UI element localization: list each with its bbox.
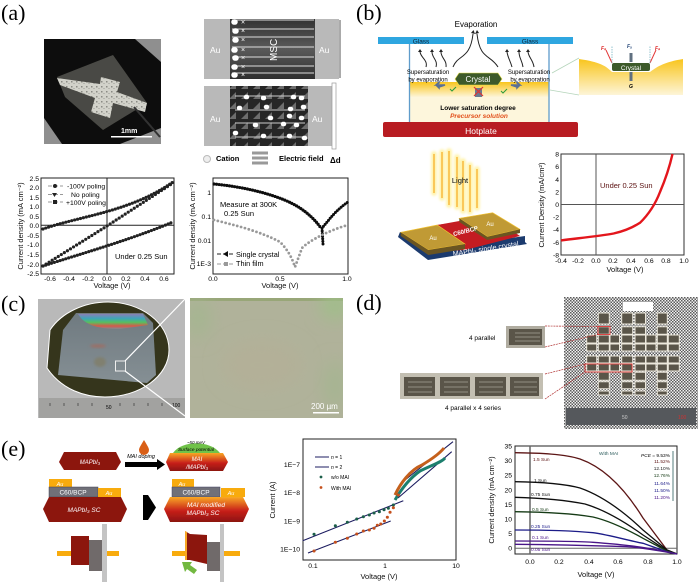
chart: J-V under poling: 0.6: [159, 276, 169, 283]
panel: b: [356, 0, 689, 274]
heading: c: (c): [1, 291, 25, 316]
chart: log J-V single crystal vs thin film: 0.0: [208, 276, 218, 283]
chart: J-V at varying sun intensity: 1.0: [672, 559, 682, 566]
diagram: MAI doping: /MAPbI₃: [185, 465, 209, 471]
chart: I-V log-log: n = 1: [331, 455, 342, 461]
icon: light rays: Light: [452, 176, 469, 185]
device: MAPbI3 single crystal cell: Au: [486, 222, 494, 228]
chart: J-V under poling: 0.0: [102, 276, 112, 283]
schematic: MSC ion migration: ×: [241, 20, 245, 26]
chart: log J-V single crystal vs thin film: Voltage (V): [261, 281, 299, 290]
chart: J-V under 0.25 sun: -6: [553, 240, 559, 247]
chart: J-V under 0.25 sun: Under 0.25 Sun: [600, 181, 653, 190]
chart: J-V under 0.25 sun: 0.8: [661, 258, 671, 265]
chart: I-V log-log: With MAI: [331, 486, 351, 492]
chart: J-V under 0.25 sun: -0.4: [555, 258, 567, 265]
chart: J-V under 0.25 sun: -4: [553, 227, 559, 234]
chart: J-V at varying sun intensity: 25: [504, 473, 512, 480]
device: MAPbI3 single crystal cell: Au: [429, 236, 437, 242]
chart: J-V under poling: 0.4: [140, 276, 150, 283]
panel: e: [1, 436, 682, 582]
chart: I-V log-log: 1: [383, 563, 387, 570]
chart: J-V under poling: 1.0: [30, 204, 39, 211]
chart: J-V at varying sun intensity: 12.10%: [654, 466, 671, 472]
schematic: MSC ion migration: ×: [241, 72, 245, 79]
diagram: evaporation crystallization: Supersaturation: [407, 70, 449, 76]
chart: J-V at varying sun intensity: 5: [508, 531, 512, 538]
chart: J-V under 0.25 sun: 0.0: [591, 258, 601, 265]
icon: green arrow: [182, 562, 197, 574]
chart: J-V at varying sun intensity: PCE = 9.53%: [641, 453, 671, 459]
chart: log J-V single crystal vs thin film: 1.0: [342, 276, 352, 283]
diagram: MAI doping: [59, 440, 228, 471]
diagram: evaporation crystallization: Glass: [413, 38, 430, 46]
diagram: evaporation crystallization: Crystal: [466, 75, 491, 84]
schematic: MSC ion migration: ×: [241, 64, 245, 71]
diagram: device after: Au: [178, 482, 185, 488]
diagram: evaporation crystallization: by evaporation: [510, 78, 550, 84]
photo: wafer: [38, 299, 185, 418]
chart: J-V at varying sun intensity: 0.5 Sun: [532, 507, 549, 513]
photo: micrograph: [190, 298, 343, 418]
diagram: device before: Au: [105, 491, 112, 497]
chart: I-V log-log: 1E−7: [284, 462, 300, 469]
chart: J-V under poling: 2.0: [30, 185, 39, 192]
scale bar label: 200 µm: [311, 402, 338, 411]
photo: wafer: 50: [106, 405, 112, 411]
chart: J-V under 0.25 sun: 1.0: [679, 258, 689, 265]
legend: cation and electric field: Cation: [216, 154, 240, 163]
photo: module array on grid: 50: [622, 415, 628, 421]
diagram: device after: Au: [227, 491, 234, 497]
diagram: evaporation crystallization: Precursor solution: [450, 113, 508, 120]
chart: J-V under poling: -2.5: [27, 271, 39, 278]
inset: crystal force balance: Fₛ: [655, 46, 661, 52]
chart: J-V at varying sun intensity: Current density (mA cm⁻²): [487, 456, 496, 544]
schematic: MSC ion migration: Au: [210, 45, 221, 55]
chart: J-V under poling: -1.0: [27, 242, 39, 249]
chart: J-V at varying sun intensity: 0.1 Sun: [532, 535, 549, 541]
chart: I-V log-log: w/o MAI: [331, 475, 349, 481]
schematic: polycrystal ion migration: Au: [210, 114, 221, 124]
schematic: MSC ion migration: ×: [241, 28, 245, 35]
heading: b: (b): [356, 0, 382, 25]
chart: J-V under poling: [16, 176, 174, 290]
chart: J-V under 0.25 sun: 8: [555, 152, 559, 158]
chart: J-V at varying sun intensity: 11.50%: [654, 488, 671, 494]
chart: J-V under 0.25 sun: 0: [555, 202, 559, 209]
panel: c: [1, 291, 349, 418]
chart: I-V log-log: [268, 439, 460, 581]
photo: 4 parallel: 4 parallel: [469, 335, 496, 342]
diagram: device after: C60/BCP: [182, 490, 210, 496]
chart: log J-V single crystal vs thin film: 0.25 Sun: [224, 209, 254, 218]
diagram: device after: [164, 479, 249, 522]
band diagram: after: [172, 524, 240, 582]
diagram: device before: MAPbI₃ SC: [68, 507, 101, 514]
chart: J-V under poling: -100V poling: [67, 184, 105, 190]
chart: log J-V single crystal vs thin film: Measure at 300K: [220, 200, 277, 209]
chart: I-V log-log: Current (A): [268, 481, 277, 519]
diagram: evaporation crystallization: Lower saturation degree: [440, 105, 516, 112]
chart: J-V under poling: +100V poling: [66, 200, 106, 207]
chart: J-V under poling: 0.2: [121, 276, 131, 283]
device: MAPbI3 single crystal cell: [398, 213, 527, 260]
chart: J-V at varying sun intensity: 0.0: [525, 559, 535, 566]
diagram: MAI doping: ~50 meV: [187, 440, 206, 445]
diagram: device before: [43, 479, 127, 522]
chart: J-V at varying sun intensity: 30: [504, 458, 512, 465]
chart: J-V under 0.25 sun: 0.2: [608, 258, 618, 265]
chart: J-V under 0.25 sun: [537, 152, 689, 274]
photo: crystal with cross electrode: [44, 39, 161, 144]
chart: J-V at varying sun intensity: 11.20%: [654, 495, 671, 501]
chart: J-V under poling: Current density (mA cm⁻²): [16, 182, 25, 270]
inset: crystal force balance: G: [629, 84, 633, 90]
heading: e: (e): [1, 436, 25, 461]
chart: J-V under 0.25 sun: -0.2: [572, 258, 584, 265]
diagram: MAI doping: MAI doping: [127, 454, 156, 460]
chart: J-V at varying sun intensity: 11.52%: [654, 459, 671, 465]
schematic: MSC ion migration: MSC: [269, 39, 280, 61]
chart: J-V under 0.25 sun: -8: [553, 252, 559, 260]
schematic: MSC ion migration: ×: [241, 55, 245, 62]
diagram: MAI doping: MAI: [192, 457, 203, 463]
chart: J-V at varying sun intensity: 0.4: [584, 559, 594, 566]
diagram: MAI doping: MAPbI₃: [80, 460, 101, 466]
chart: log J-V single crystal vs thin film: 1: [207, 190, 211, 197]
diagram: MAI doping: Surface potential: [178, 447, 215, 453]
chart: J-V under poling: -2.0: [27, 262, 39, 269]
legend: cation and electric field: Δd: [330, 156, 341, 165]
chart: J-V under 0.25 sun: 4: [555, 177, 559, 184]
chart: I-V log-log: n = 2: [331, 465, 342, 471]
chart: I-V log-log: 1E−10: [280, 546, 300, 554]
diagram: device after: MAI modified: [187, 502, 225, 509]
scale bar label: 1mm: [121, 128, 137, 135]
chart: J-V at varying sun intensity: 0.6: [613, 559, 623, 566]
chart: log J-V single crystal vs thin film: Current density (mA cm⁻²): [188, 182, 197, 270]
panel: a: [1, 0, 352, 290]
schematic: polycrystal ion migration: [204, 83, 336, 149]
schematic: polycrystal ion migration: Au: [312, 114, 323, 124]
chart: J-V under poling: -0.4: [63, 276, 75, 283]
chart: J-V under 0.25 sun: Voltage (V): [606, 265, 644, 274]
chart: J-V at varying sun intensity: 10: [504, 516, 512, 524]
photo: module array on grid: [564, 297, 698, 429]
zoom guide lines: [545, 326, 598, 399]
chart: J-V under poling: 2.5: [30, 176, 39, 183]
chart: J-V under 0.25 sun: Current Density (mA/cm²): [537, 162, 546, 248]
schematic: MSC ion migration: ×: [241, 37, 245, 44]
chart: J-V at varying sun intensity: 0: [508, 546, 512, 552]
chart: J-V at varying sun intensity: 35: [504, 444, 512, 450]
photo: 4 parallel x 4 series: 4 parallel x 4 series: [445, 405, 502, 412]
photo: 4 parallel x 4 series: [400, 373, 543, 412]
chart: J-V at varying sun intensity: 0.25 Sun: [531, 524, 551, 530]
band diagram: before: [57, 524, 119, 582]
device: MAPbI3 single crystal cell: MAPbI₃ single crystal: [452, 241, 519, 258]
chart: log J-V single crystal vs thin film: [188, 178, 352, 290]
schematic: MSC ion migration: [204, 19, 341, 79]
chart: J-V under poling: -0.5: [27, 233, 39, 240]
chart: I-V log-log: 1E−9: [284, 518, 300, 526]
chart: J-V under poling: 1.5: [30, 195, 39, 202]
chart: J-V under 0.25 sun: 6: [555, 164, 559, 171]
inset: crystal force balance: [550, 44, 683, 95]
device: MAPbI3 single crystal cell: C60/BCP: [453, 226, 479, 238]
hotplate: [383, 122, 578, 137]
photo: wafer: 100: [172, 403, 181, 409]
chart: J-V under 0.25 sun: 0.6: [644, 258, 654, 265]
chart: J-V at varying sun intensity: 15: [504, 502, 512, 509]
chart: J-V under 0.25 sun: 0.4: [626, 258, 636, 265]
panel: d: [356, 290, 698, 429]
chart: log J-V single crystal vs thin film: Thin film: [236, 259, 264, 268]
chart: I-V log-log: 1E−8: [284, 490, 300, 497]
chart: J-V under 0.25 sun: 2: [555, 190, 559, 196]
chart: I-V log-log: 10: [452, 563, 460, 570]
chart: J-V under poling: 0.0: [30, 223, 39, 230]
chart: log J-V single crystal vs thin film: Single crystal: [236, 250, 280, 259]
diagram: device after: MAPbI₃ SC: [187, 510, 220, 517]
photo: module array on grid: 100: [678, 415, 687, 421]
legend: cation and electric field: [204, 153, 341, 165]
chart: J-V at varying sun intensity: 1.5 Sun: [533, 457, 550, 463]
chart: J-V under poling: Under 0.25 Sun: [115, 252, 168, 261]
icon: light rays: [434, 151, 477, 212]
chart: J-V under poling: -0.2: [82, 276, 94, 283]
chart: log J-V single crystal vs thin film: 0.5: [275, 276, 285, 283]
chart: J-V at varying sun intensity: 1 Sun: [534, 478, 547, 484]
hotplate: Hotplate: [465, 126, 497, 136]
chart: J-V at varying sun intensity: With MAI: [599, 451, 618, 457]
chart: J-V under 0.25 sun: -2: [553, 214, 559, 222]
schematic: MSC ion migration: ×: [241, 47, 245, 54]
diagram: evaporation crystallization: by evaporation: [408, 78, 448, 84]
photo: 4 parallel: [469, 326, 545, 348]
chart: J-V at varying sun intensity: 11.64%: [654, 481, 671, 487]
chart: J-V at varying sun intensity: 0.8: [643, 559, 653, 566]
chart: J-V at varying sun intensity: 0.75 Sun: [531, 492, 551, 498]
inset: crystal force balance: Fₐ: [627, 44, 632, 50]
chart: J-V at varying sun intensity: [487, 444, 682, 579]
chart: log J-V single crystal vs thin film: 0.01: [198, 238, 211, 245]
chart: J-V under poling: -1.5: [27, 252, 39, 259]
inset: crystal force balance: Fₛ: [601, 46, 607, 52]
legend: cation and electric field: Electric field: [279, 154, 324, 163]
chart: J-V under poling: 0.5: [30, 214, 39, 221]
arrow: before to after: [143, 495, 156, 520]
chart: I-V log-log: 0.1: [308, 563, 318, 570]
chart: J-V under poling: No poling: [71, 192, 100, 199]
diagram: evaporation crystallization: Glass: [522, 38, 539, 46]
diagram: device before: C60/BCP: [59, 490, 87, 496]
diagram: evaporation crystallization: Evaporation: [455, 20, 497, 29]
chart: log J-V single crystal vs thin film: 1E-3: [197, 261, 211, 268]
chart: J-V under poling: -0.6: [44, 276, 56, 283]
chart: I-V log-log: Voltage (V): [360, 572, 398, 581]
zoom guide lines: [125, 299, 185, 416]
heading: d: (d): [356, 290, 382, 315]
heading: a: (a): [1, 0, 25, 25]
chart: J-V at varying sun intensity: 12.76%: [654, 473, 671, 479]
chart: log J-V single crystal vs thin film: 0.1: [202, 214, 211, 221]
diagram: device before: Au: [56, 482, 63, 488]
chart: J-V at varying sun intensity: 20: [504, 487, 512, 494]
diagram: evaporation crystallization: [378, 20, 573, 122]
schematic: MSC ion migration: Au: [319, 45, 330, 55]
chart: J-V at varying sun intensity: Voltage (V): [577, 570, 615, 579]
chart: J-V under poling: Voltage (V): [93, 281, 131, 290]
chart: J-V at varying sun intensity: 0.05 Sun: [531, 547, 551, 553]
inset: crystal force balance: Crystal: [621, 65, 642, 72]
chart: J-V at varying sun intensity: 0.2: [554, 559, 564, 566]
diagram: evaporation crystallization: Supersaturation: [508, 70, 550, 76]
